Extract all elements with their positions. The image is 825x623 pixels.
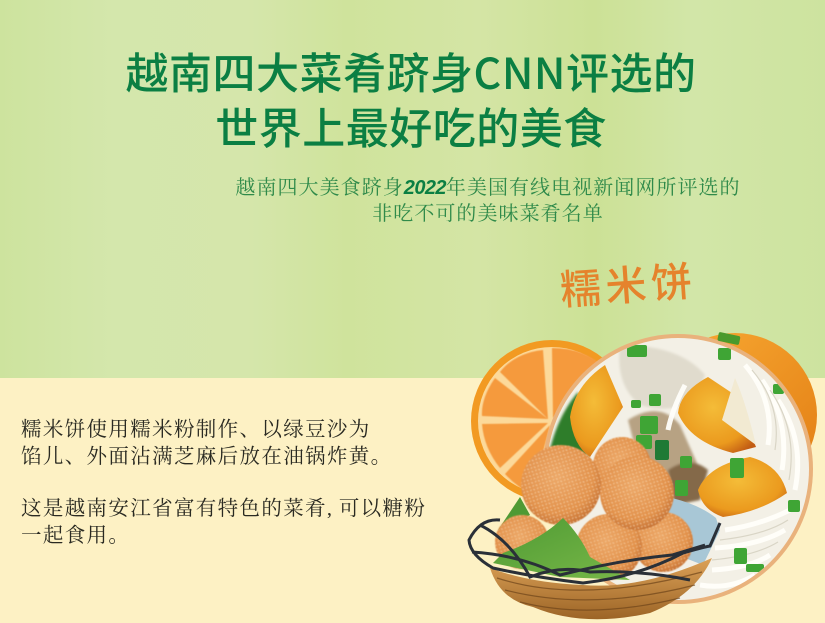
icon: blue dish [665, 498, 720, 565]
icon: orange slice [471, 340, 633, 502]
subtitle: 非吃不可的美味菜肴名单 [372, 203, 604, 225]
subtitle: 越南四大美食跻身2022年美国有线电视新闻网所评选的 [235, 177, 741, 199]
title [126, 40, 696, 157]
background: green upper panel [0, 0, 825, 378]
subtitle [235, 176, 741, 225]
food illustration [468, 332, 817, 620]
scallions [627, 345, 800, 572]
description text: 馅儿、外面沾满芝麻后放在油锅炸黄。 [21, 446, 392, 468]
description text [21, 418, 392, 468]
background: cream lower panel [0, 378, 825, 623]
icon: sesame balls basket [469, 437, 720, 619]
icon: right orange [653, 333, 817, 497]
fried cake pieces [570, 365, 787, 517]
description text: 糯米饼使用糯米粉制作、以绿豆沙为 [21, 419, 371, 441]
icon: noodle plate [543, 332, 813, 604]
title: 越南四大菜肴跻身CNN评选的 [126, 40, 696, 102]
description text second paragraph: 这是越南安江省富有特色的菜肴, 可以糖粉 [21, 498, 426, 520]
title: 世界上最好吃的美食 [215, 95, 607, 157]
description text second paragraph: 一起食用。 [21, 525, 130, 547]
description text second paragraph [21, 497, 426, 547]
dish name heading: 糯米饼 [558, 247, 698, 317]
